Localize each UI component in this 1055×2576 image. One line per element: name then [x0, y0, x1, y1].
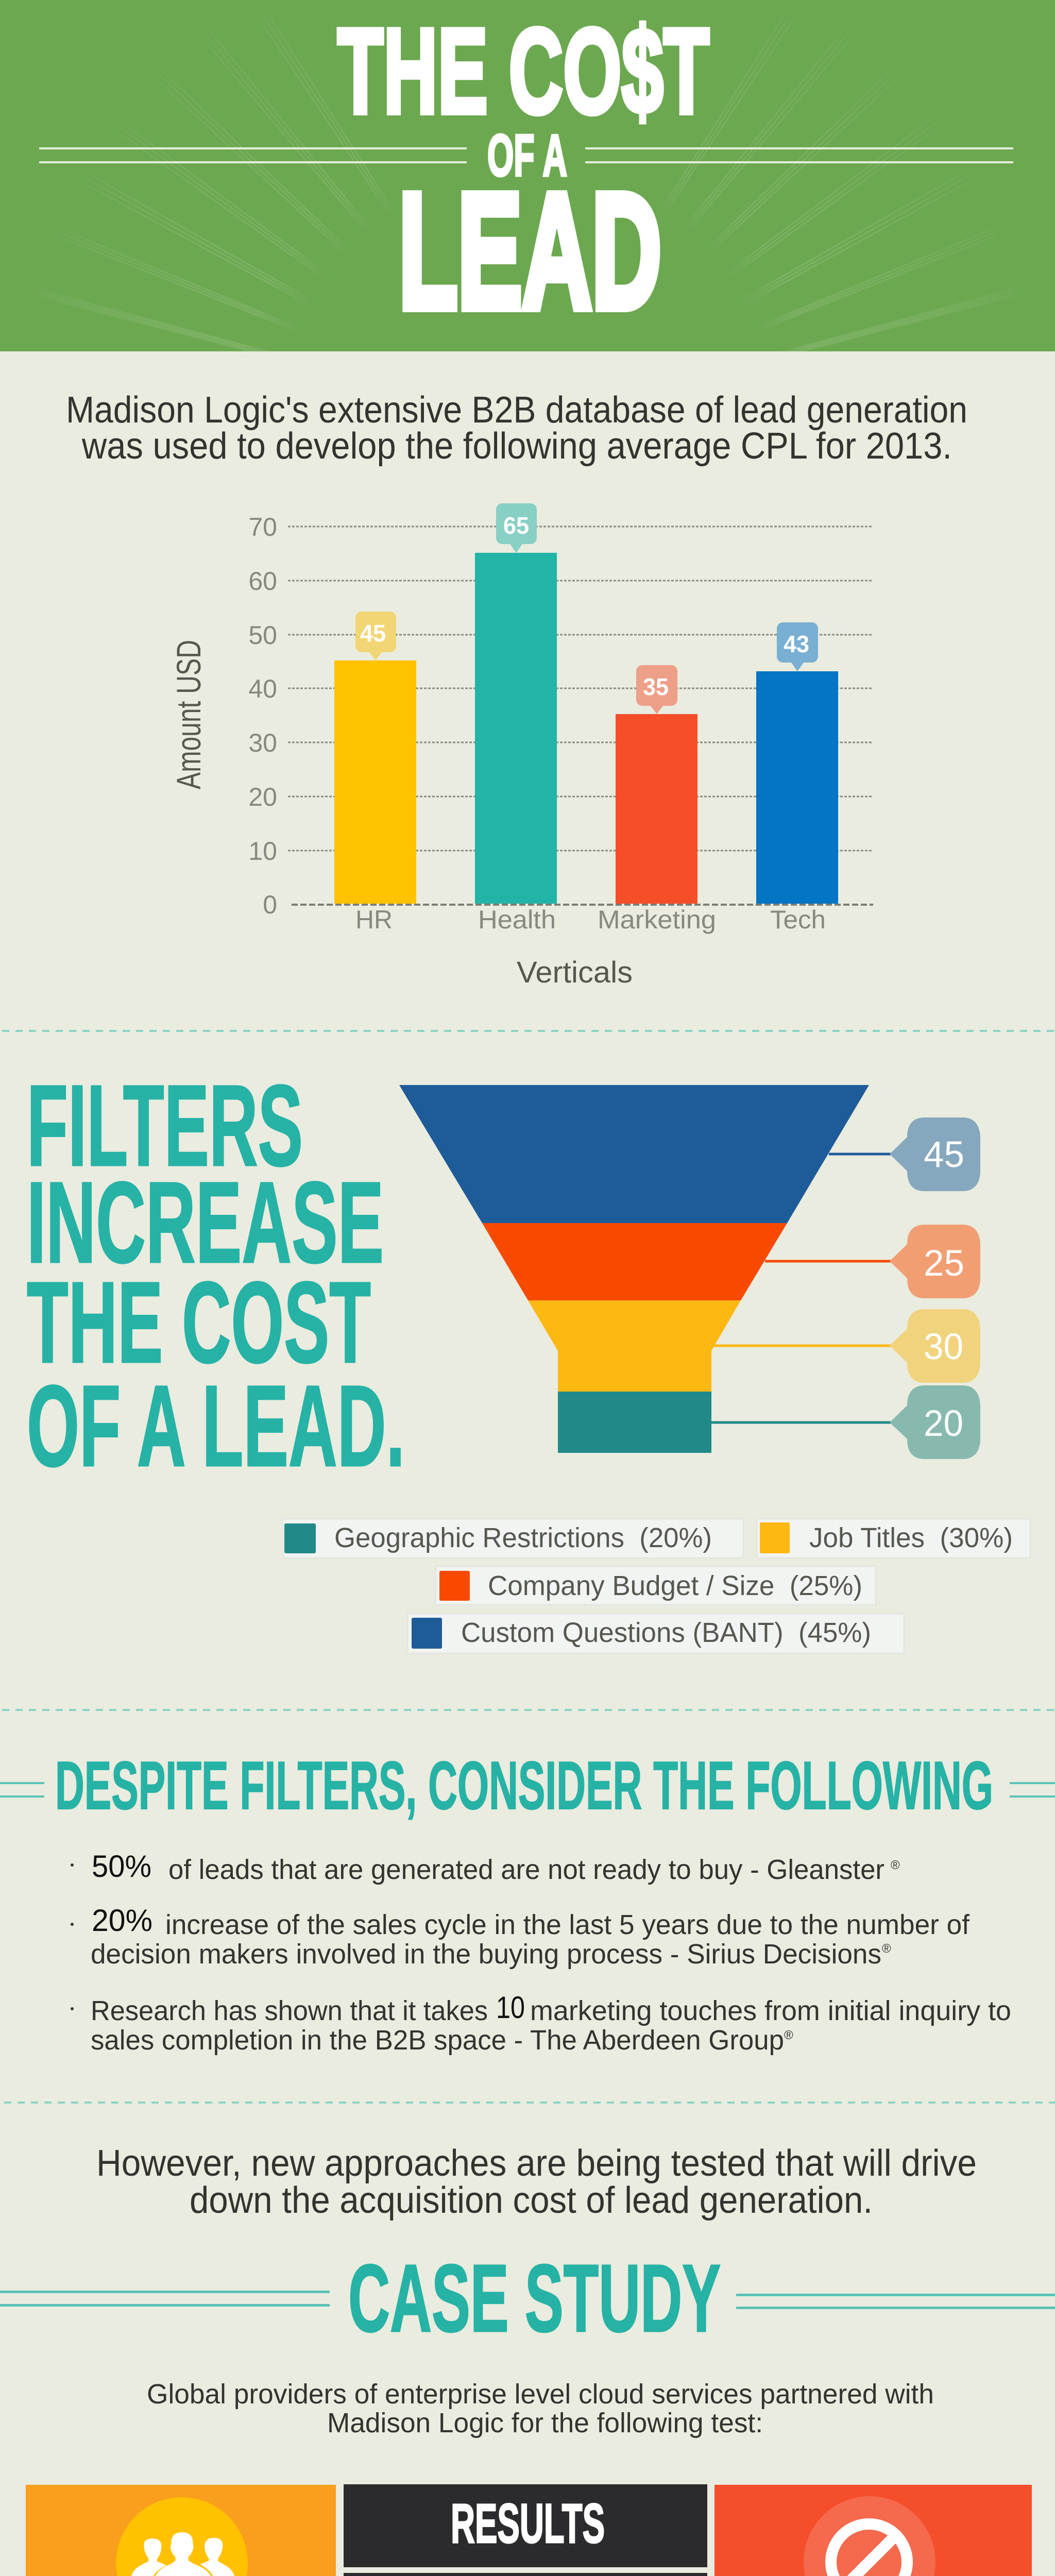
funnel callout: 30: 30 [924, 1327, 963, 1367]
x axis labels: Tech [770, 905, 826, 934]
intro text [66, 389, 967, 467]
title: the cost: THE CO$T [337, 3, 709, 139]
fact: 50% of leads: 50% [92, 1849, 151, 1884]
bar: Health [475, 503, 557, 904]
bar: Marketing: 35 [643, 673, 669, 700]
legend: job titles: Job Titles (30%) [809, 1522, 1013, 1553]
icon: people [116, 2497, 248, 2576]
x axis title: Verticals [517, 956, 633, 989]
y axis ticks [248, 513, 277, 919]
fact: 50% of leads: ® [891, 1858, 900, 1872]
panel: results [344, 2484, 707, 2576]
legend: company budget: Company Budget / Size (25%) [488, 1570, 862, 1601]
heading: case study [0, 2245, 1055, 2352]
x axis labels: HR [355, 905, 393, 934]
title: lead: LEAD [399, 160, 661, 343]
y axis ticks: 20 [248, 783, 277, 811]
heading: case study: CASE STUDY [348, 2245, 721, 2352]
title: of a: OF A [487, 123, 567, 189]
fact: 50% of leads: of leads that are generated are not ready to buy - Gleanster [168, 1854, 884, 1885]
intro text: Madison Logic's extensive B2B database of lead generation [66, 389, 967, 431]
legend: custom questions: Custom Questions (BANT) (45%) [461, 1617, 871, 1648]
funnel legend [283, 1519, 1030, 1653]
panel: campaign B [714, 2485, 1032, 2576]
fact: 20% increase [71, 1903, 970, 1970]
transition text: down the acquisition cost of lead generation. [190, 2180, 873, 2221]
heading: filters increase the cost of a lead: THE COST [27, 1258, 371, 1387]
funnel callout: 20: 20 [924, 1403, 963, 1444]
funnel callout: 45: 45 [924, 1134, 964, 1175]
intro text: was used to develop the following average CPL for 2013. [81, 426, 952, 467]
legend: company budget [436, 1566, 876, 1605]
legend: geographic restrictions: Geographic Restrictions (20%) [334, 1522, 712, 1553]
funnel callout: 25: 25 [924, 1243, 964, 1284]
case study intro: Global providers of enterprise level cloud services partnered with [147, 2379, 934, 2410]
fact: 10 marketing touches: Research has shown that it takes [91, 1995, 488, 2026]
funnel callout: 45 [829, 1117, 980, 1191]
title: of a [39, 123, 1013, 189]
bar: Tech: 43 [784, 631, 809, 657]
heading: filters increase the cost of a lead [27, 1061, 405, 1490]
x axis labels [355, 905, 826, 934]
x axis labels: Marketing [598, 905, 716, 934]
y axis label: Amount USD [169, 640, 208, 789]
y axis ticks: 70 [248, 513, 277, 541]
y axis ticks: 30 [248, 728, 277, 757]
icon: no sign [804, 2496, 935, 2576]
fact: 20% increase: decision makers involved in the buying process - Sirius Decisions [91, 1939, 881, 1970]
fact: 20% increase: increase of the sales cycle in the last 5 years due to the number of [165, 1909, 970, 1940]
results header: RESULTS [451, 2492, 605, 2554]
bar: HR: 45 [360, 620, 386, 647]
y axis ticks: 10 [248, 837, 277, 866]
legend: job titles [757, 1519, 1030, 1558]
funnel callout: 30 [714, 1309, 980, 1383]
case study intro: Madison Logic for the following test: [327, 2408, 763, 2438]
heading: filters increase the cost of a lead: INCREASE [27, 1158, 384, 1287]
fact: 20% increase: ® [882, 1942, 891, 1956]
bar chart [169, 503, 873, 989]
fact: 10 marketing touches [71, 1990, 1011, 2056]
case study intro [147, 2379, 934, 2438]
fact: 10 marketing touches: ® [784, 2028, 793, 2042]
transition text: However, new approaches are being tested that will drive [96, 2143, 977, 2184]
heading: filters increase the cost of a lead: OF A LEAD. [27, 1362, 405, 1490]
panel: campaign A [26, 2485, 336, 2576]
y axis ticks: 0 [263, 890, 277, 919]
fact: 10 marketing touches: sales completion in the B2B space - The Aberdeen Group [91, 2025, 784, 2056]
bar: HR [334, 612, 416, 904]
bar: Tech [756, 622, 838, 904]
funnel chart [399, 1085, 980, 1459]
fact: 10 marketing touches: marketing touches from initial inquiry to [530, 1995, 1011, 2026]
transition text [96, 2143, 977, 2221]
legend: geographic restrictions [283, 1519, 743, 1558]
y axis ticks: 60 [248, 567, 277, 596]
header banner [0, 0, 1055, 351]
bar: Health: 65 [503, 512, 529, 539]
fact: 20% increase: 20% [92, 1903, 152, 1938]
legend: custom questions [407, 1614, 904, 1653]
bar: Marketing [616, 665, 697, 904]
funnel callout: 25 [765, 1225, 980, 1298]
funnel callout: 20 [711, 1385, 980, 1459]
fact: 10 marketing touches: 10 [496, 1990, 525, 2025]
y axis ticks: 40 [248, 674, 277, 703]
y axis ticks: 50 [248, 621, 277, 650]
heading: filters increase the cost of a lead: FILTERS [27, 1061, 303, 1190]
results header [344, 2484, 707, 2567]
x axis labels: Health [478, 905, 556, 934]
